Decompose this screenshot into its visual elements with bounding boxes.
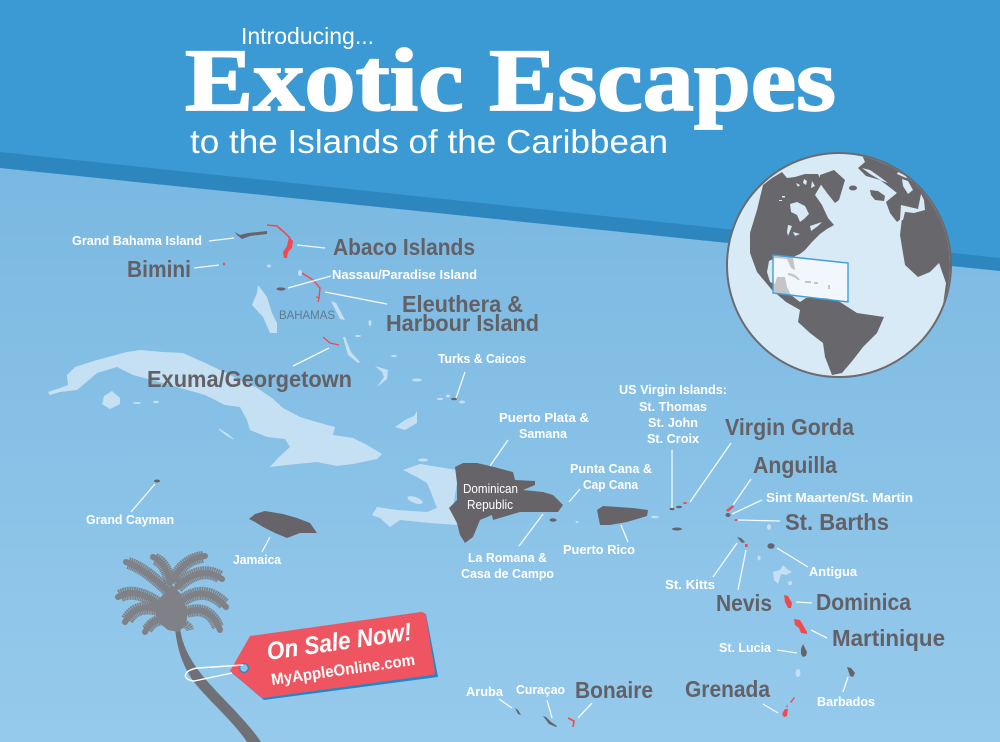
Caribbean red and grey small islands bbox=[223, 225, 855, 727]
label: Exuma/Georgetown bbox=[147, 348, 352, 392]
small keys bbox=[133, 401, 234, 440]
hudson bay, lakes and seas bbox=[779, 168, 925, 236]
map area box bbox=[773, 255, 848, 302]
Antigua bbox=[767, 543, 775, 549]
Abaco bbox=[267, 225, 290, 253]
label: Barbados bbox=[817, 677, 875, 709]
label: La Romana & Casa de Campo: La Romana & bbox=[468, 551, 547, 565]
Jamaica bbox=[249, 511, 317, 538]
label: Punta Cana & Cap Cana: Cap Cana bbox=[583, 478, 639, 492]
Mona bbox=[576, 521, 578, 523]
Eleuthera bbox=[302, 273, 320, 302]
label: Dominica: Dominica bbox=[816, 589, 911, 615]
label: Puerto Plata & Samana: Samana bbox=[519, 427, 568, 441]
tag hole bbox=[240, 664, 248, 672]
label: St. Barths: St. Barths bbox=[785, 509, 889, 535]
label: Virgin Gorda bbox=[690, 414, 854, 502]
St Lucia bbox=[801, 644, 807, 657]
tag shadow bbox=[232, 614, 438, 700]
main title: Exotic Escapes bbox=[185, 32, 836, 130]
label: Nassau/Paradise Island: Nassau/Paradise Island bbox=[332, 268, 477, 282]
label: US Virgin Islands bbox=[619, 383, 727, 508]
label: Jamaica: Jamaica bbox=[233, 553, 282, 567]
label: St. Kitts bbox=[665, 543, 737, 592]
Barbuda bbox=[767, 524, 771, 530]
label: US Virgin Islands: St. John bbox=[648, 416, 698, 430]
label: Nassau/Paradise Island bbox=[288, 268, 477, 288]
label: Bonaire bbox=[575, 677, 653, 718]
Cuba bbox=[48, 350, 382, 467]
St Barths bbox=[734, 519, 738, 521]
label: Aruba bbox=[466, 685, 512, 708]
tag body bbox=[230, 612, 435, 698]
Nassau bbox=[276, 287, 286, 291]
label: Puerto Rico bbox=[563, 525, 635, 557]
label: Grenada: Grenada bbox=[685, 676, 770, 702]
Bahamas light islands bbox=[252, 264, 465, 430]
label: Nevis: Nevis bbox=[716, 590, 772, 616]
locator globe bbox=[727, 150, 962, 377]
label: Antigua: Antigua bbox=[809, 565, 858, 579]
palm tree bbox=[118, 556, 261, 742]
label: Puerto Plata & Samana: Puerto Plata & bbox=[499, 411, 589, 425]
label: Aruba: Aruba bbox=[466, 685, 504, 699]
Bonaire bbox=[568, 718, 574, 727]
label: La Romana & Casa de Campo: Casa de Campo bbox=[461, 567, 554, 581]
label: Curacao bbox=[516, 683, 565, 718]
Martinique bbox=[794, 619, 807, 634]
label: BAHAMAS: BAHAMAS bbox=[279, 308, 335, 322]
Dominica bbox=[784, 595, 792, 608]
label: Antigua bbox=[777, 548, 858, 579]
fronds bbox=[118, 556, 226, 632]
label: Dominican Republic: Republic bbox=[467, 498, 513, 512]
label: St. Kitts: St. Kitts bbox=[665, 578, 715, 592]
Puerto Rico bbox=[597, 506, 648, 525]
header band: diagonal blue bbox=[0, 0, 1000, 271]
Saona bbox=[550, 518, 556, 522]
Nevis bbox=[745, 544, 748, 547]
intro line: Introducing... bbox=[241, 23, 374, 49]
label: Exuma/Georgetown: Exuma/Georgetown bbox=[147, 366, 352, 392]
Exuma bbox=[323, 337, 339, 345]
label: US Virgin Islands: US Virgin Islands: bbox=[619, 383, 727, 397]
Anguilla bbox=[726, 505, 734, 512]
Turks bbox=[451, 398, 457, 400]
label: Sint Maarten/St. Martin bbox=[732, 491, 913, 514]
continents bbox=[750, 150, 962, 375]
tag text: On Sale Now!: On Sale Now! bbox=[265, 618, 413, 666]
label: US Virgin Islands: St. Thomas bbox=[639, 400, 707, 414]
Dominican Republic bbox=[449, 463, 563, 543]
map of the Caribbean bbox=[48, 225, 855, 727]
label: Grand Bahama Island: Grand Bahama Island bbox=[72, 234, 202, 248]
Barbados bbox=[847, 667, 855, 677]
label: La Romana & Casa de Campo bbox=[461, 514, 554, 581]
label: Curacao: Curaçao bbox=[516, 683, 565, 697]
Sint Maarten bbox=[726, 513, 730, 517]
US Virgin Islands bbox=[670, 506, 682, 530]
label: Eleuthera & Harbour Island: Harbour Island bbox=[386, 310, 539, 336]
title block bbox=[185, 23, 836, 160]
label: Anguilla: Anguilla bbox=[753, 452, 837, 478]
label: Anguilla bbox=[733, 452, 837, 505]
Virgin Gorda bbox=[683, 502, 687, 504]
Aruba bbox=[515, 708, 521, 715]
label: Punta Cana & Cap Cana bbox=[569, 462, 652, 502]
Montserrat bbox=[758, 556, 760, 560]
label: St. Lucia: St. Lucia bbox=[719, 641, 772, 655]
label: Turks & Caicos: Turks & Caicos bbox=[438, 352, 526, 366]
label: Bonaire: Bonaire bbox=[575, 677, 653, 703]
St Vincent bbox=[796, 669, 800, 677]
Guadeloupe bbox=[773, 565, 792, 584]
Isle of Youth bbox=[102, 391, 120, 409]
label: Dominican Republic: Dominican bbox=[463, 482, 518, 496]
label: Barbados: Barbados bbox=[817, 695, 875, 709]
Grenada bbox=[782, 709, 788, 717]
Grand Bahama bbox=[235, 231, 267, 239]
label: Bimini: Bimini bbox=[127, 256, 191, 282]
label: Jamaica bbox=[233, 537, 282, 567]
label: Puerto Plata & Samana bbox=[490, 411, 589, 466]
label: Eleuthera & Harbour Island bbox=[325, 291, 539, 336]
label: Grand Cayman bbox=[86, 484, 174, 527]
label: Martinique: Martinique bbox=[832, 625, 945, 651]
label: Nevis bbox=[716, 550, 772, 616]
Grenadines bbox=[786, 697, 795, 708]
label: Virgin Gorda: Virgin Gorda bbox=[725, 414, 854, 440]
label: St. Lucia bbox=[719, 641, 797, 655]
Haiti small islands bbox=[406, 458, 428, 506]
trunk bbox=[175, 628, 261, 742]
tag text: MyAppleOnline.com: MyAppleOnline.com bbox=[270, 652, 416, 689]
label: Dominican Republic bbox=[463, 482, 518, 512]
label: Abaco Islands: Abaco Islands bbox=[333, 234, 475, 260]
label: Punta Cana & Cap Cana: Punta Cana & bbox=[570, 462, 652, 476]
label: US Virgin Islands: St. Croix bbox=[647, 432, 699, 446]
label: Turks & Caicos bbox=[438, 352, 526, 398]
label: Grand Cayman: Grand Cayman bbox=[86, 513, 174, 527]
Haiti bbox=[372, 464, 457, 527]
label: Eleuthera & Harbour Island: Eleuthera & bbox=[402, 291, 523, 317]
Vieques bbox=[651, 516, 659, 518]
Cayman bbox=[154, 480, 160, 482]
crown bbox=[155, 585, 188, 632]
tag string bbox=[185, 665, 243, 681]
subtitle: to the Islands of the Caribbean bbox=[190, 123, 668, 160]
sale tag bbox=[185, 612, 438, 700]
label: Sint Maarten/St. Martin: Sint Maarten/St. Martin bbox=[766, 491, 913, 505]
St Kitts bbox=[737, 537, 745, 543]
Curacao bbox=[543, 716, 557, 727]
Bimini bbox=[223, 262, 225, 266]
label: Puerto Rico: Puerto Rico bbox=[563, 543, 635, 557]
